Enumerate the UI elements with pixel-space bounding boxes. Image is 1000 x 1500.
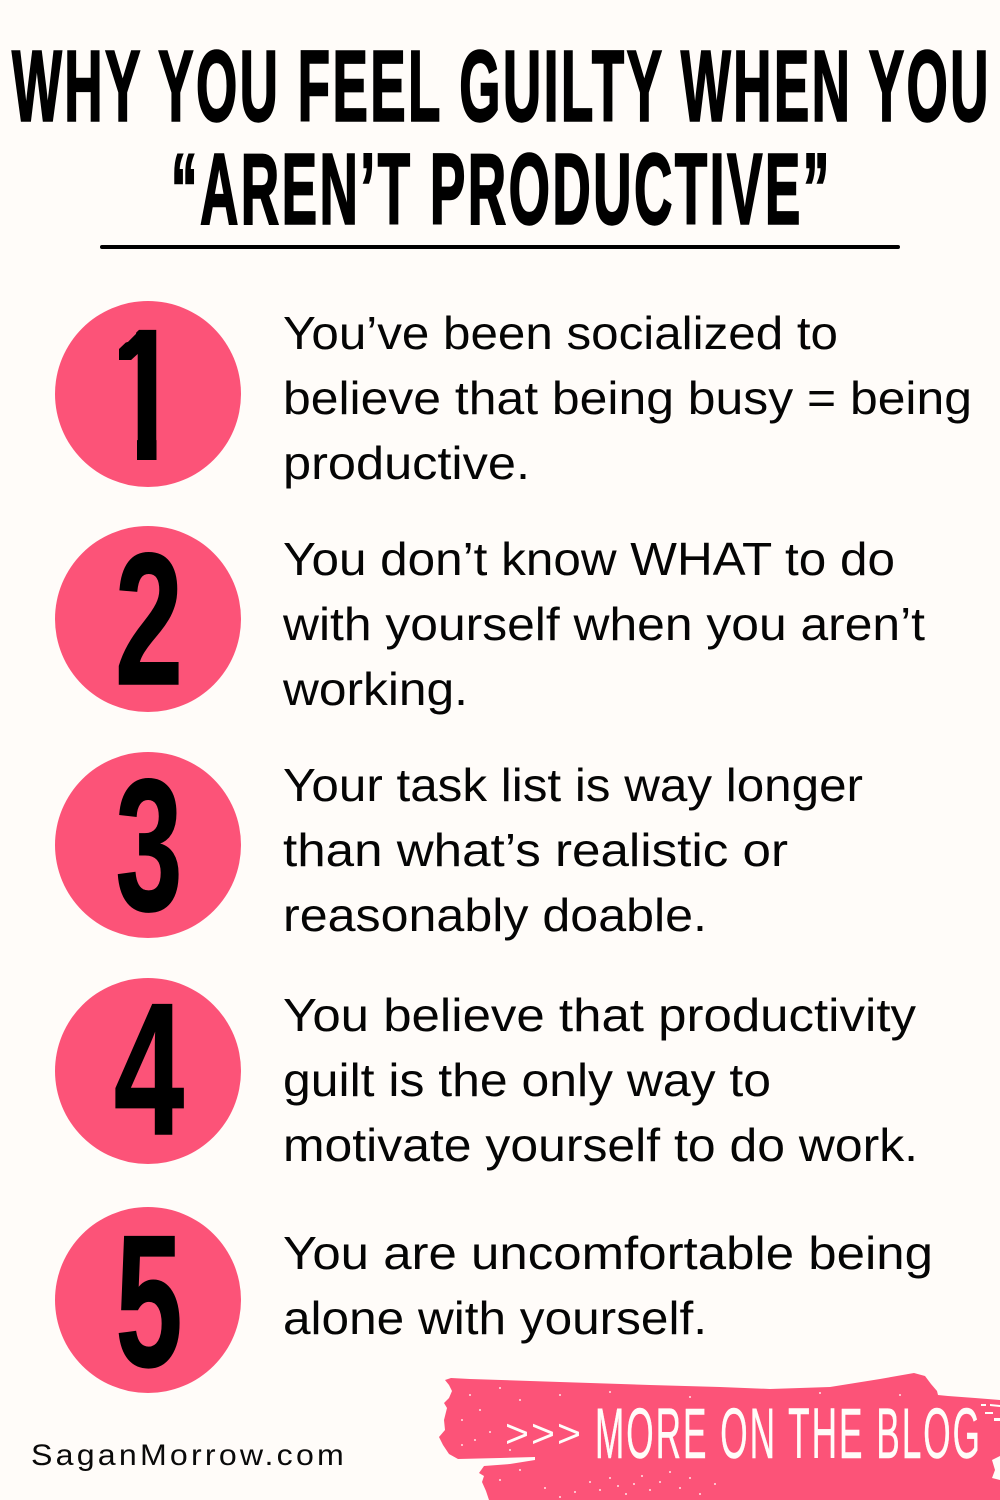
item 1 text: You’ve been socialized to [283,307,838,359]
item 2 text: with yourself when you aren’t [282,598,925,650]
item 2 text [282,533,925,715]
number badge 5: 5 [116,1197,182,1406]
item 4 text: guilt is the only way to [283,1054,771,1106]
item 4 text: motivate yourself to do work. [283,1119,918,1171]
item 4 [55,964,918,1174]
item 1 text: believe that being busy = being [283,372,972,424]
number badge 3: 3 [116,741,182,950]
item 1 text [283,307,972,489]
item 4 text [283,989,918,1171]
title [12,30,991,246]
number badge 4 [55,964,241,1174]
number badge 1 [55,301,241,487]
arrows: >>> [505,1412,583,1456]
call to action banner [439,1373,1000,1500]
item 3 text: reasonably doable. [283,889,707,941]
item 5 text: alone with yourself. [283,1292,707,1344]
brush stroke [439,1373,1000,1500]
item 5 text [283,1227,933,1344]
number badge 2 [55,513,241,724]
number badge 1: 1 [108,290,179,501]
item 2 text: working. [282,663,468,715]
item 1 text: productive. [283,437,530,489]
website url: SaganMorrow.com [31,1439,347,1472]
item 3 text: than what’s realistic or [283,824,788,876]
item 1 [55,301,969,488]
item 5 [55,1197,933,1406]
item 3 text [283,759,863,941]
item 5 text: You are uncomfortable being [283,1227,933,1279]
number badge 3 [55,741,241,950]
item 4 text: You believe that productivity [283,989,916,1041]
item 2 text: You don’t know WHAT to do [283,533,895,585]
item 2 [55,513,925,724]
number badge 5 [55,1197,241,1406]
item 3 [55,741,863,950]
item 3 text: Your task list is way longer [283,759,863,811]
number badge 2: 2 [115,513,183,724]
number badge 4: 4 [114,964,184,1174]
